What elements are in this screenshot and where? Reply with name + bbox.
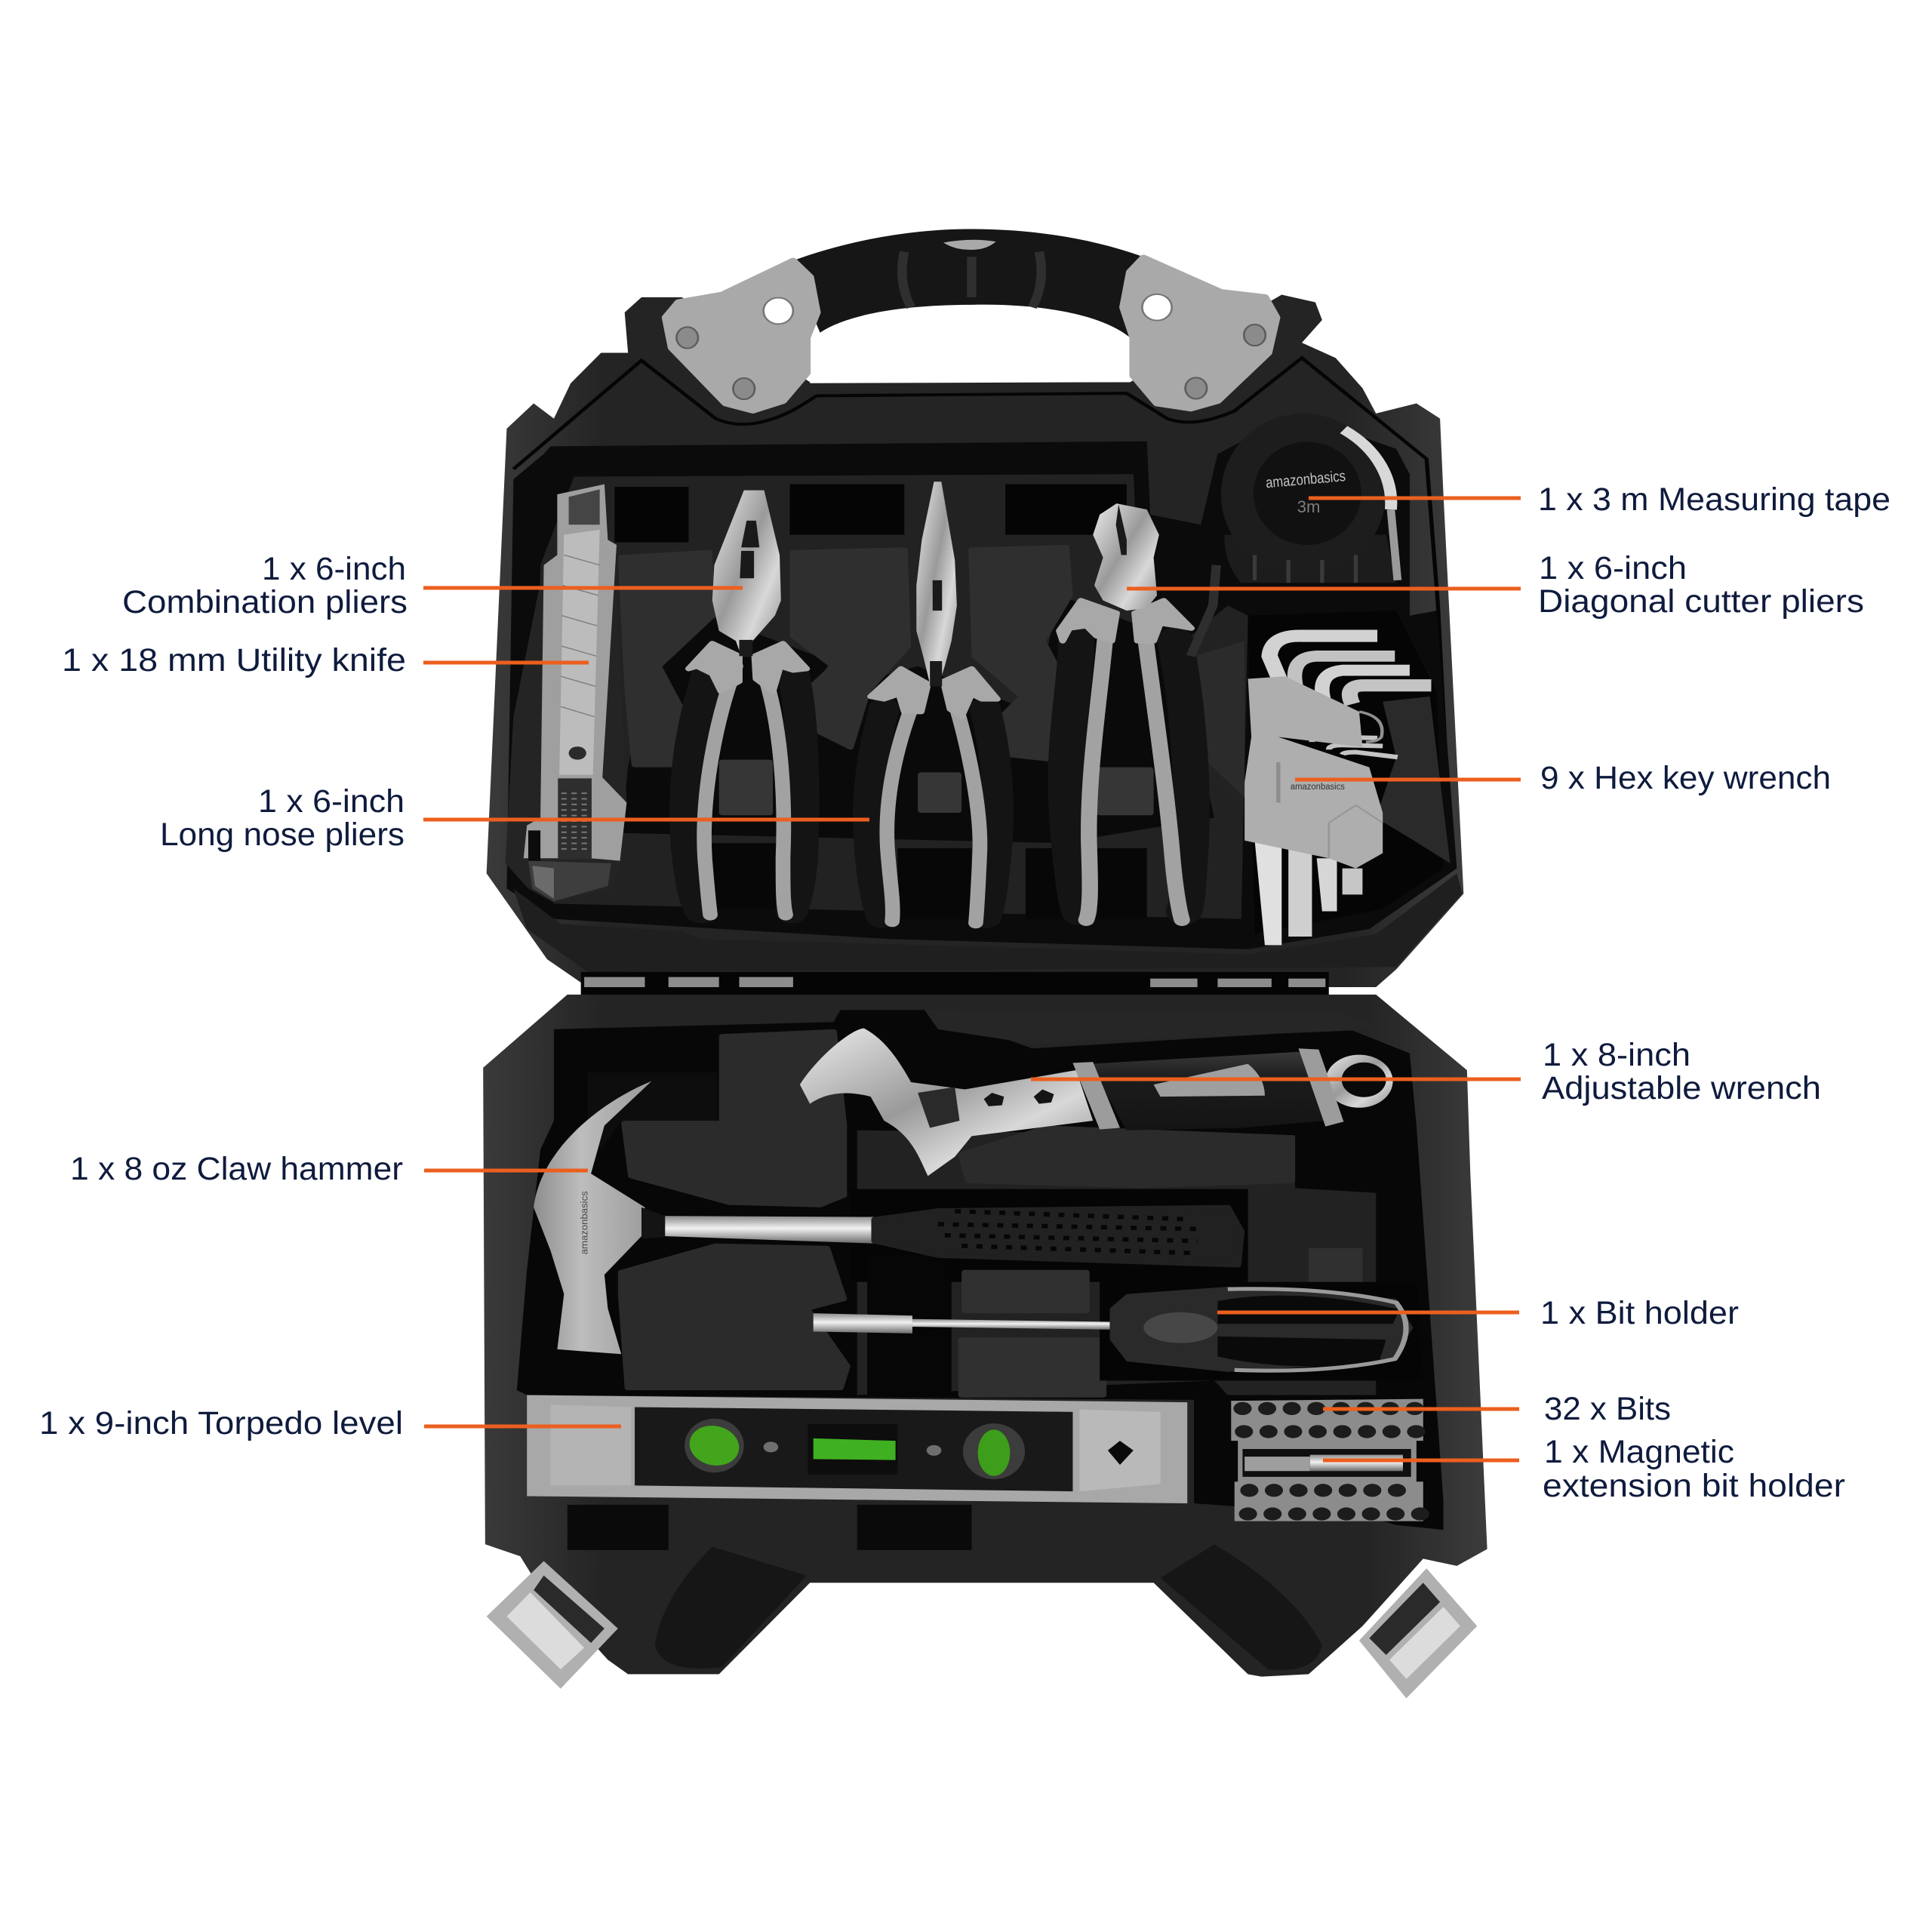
label: adjustable wrench quantity: 1 x 8-inch	[1543, 1037, 1690, 1073]
left handle bracket	[666, 261, 817, 411]
callout: adjustable wrench	[1031, 1037, 1821, 1106]
callout: combination pliers	[122, 551, 743, 620]
icon: combination pliers	[686, 491, 807, 915]
icon: diagonal cutter pliers	[1060, 503, 1192, 920]
label: bits: 32 x Bits	[1544, 1391, 1671, 1427]
label: hex key wrench: 9 x Hex key wrench	[1540, 760, 1831, 796]
right handle bracket	[1123, 258, 1276, 408]
hex key brand text: amazonbasics	[1291, 781, 1345, 792]
tape brand text: amazonbasics	[1265, 468, 1346, 491]
icon: right latch	[1359, 1568, 1477, 1698]
label: torpedo level: 1 x 9-inch Torpedo level	[39, 1405, 403, 1441]
icon: long nose pliers	[868, 481, 998, 923]
toolbox base with hand tools	[483, 995, 1487, 1698]
icon: claw hammer	[534, 1081, 1241, 1354]
tape size text: 3m	[1297, 497, 1320, 516]
icon: left latch	[487, 1561, 618, 1689]
icon: measuring tape	[1221, 414, 1398, 583]
label: long nose pliers quantity: 1 x 6-inch	[258, 783, 405, 820]
label: measuring tape: 1 x 3 m Measuring tape	[1538, 481, 1890, 518]
label: utility knife: 1 x 18 mm Utility knife	[62, 642, 406, 678]
label: extension bit holder name: extension bit holder	[1543, 1468, 1845, 1504]
hinges	[581, 972, 1329, 995]
lower panel with foot pads	[568, 1505, 1322, 1670]
icon: bit holder screwdriver	[814, 1282, 1423, 1380]
lid shell	[487, 295, 1463, 987]
callout: long nose pliers	[160, 783, 869, 853]
hammer brand text: amazonbasics	[579, 1191, 590, 1254]
icon: adjustable wrench	[800, 1029, 1393, 1176]
base recess	[517, 1010, 1444, 1530]
label: combination pliers quantity: 1 x 6-inch	[262, 551, 406, 587]
label: long nose pliers name: Long nose pliers	[160, 817, 405, 853]
label: adjustable wrench name: Adjustable wrench	[1542, 1070, 1821, 1106]
callout: diagonal cutter pliers	[1127, 550, 1864, 620]
label: diagonal cutter quantity: 1 x 6-inch	[1539, 550, 1687, 586]
label: claw hammer: 1 x 8 oz Claw hammer	[70, 1151, 403, 1187]
handle	[789, 229, 1140, 383]
toolbox lid with hand tools	[487, 229, 1463, 995]
label: magnetic quantity: 1 x Magnetic	[1544, 1434, 1734, 1470]
label: combination pliers name: Combination pliers	[122, 584, 408, 620]
handle grip	[789, 229, 1140, 337]
icon: utility knife	[506, 485, 626, 903]
label: bit holder: 1 x Bit holder	[1540, 1295, 1739, 1331]
callout: magnetic extension bit holder	[1323, 1434, 1845, 1504]
icon: lanyard	[1191, 565, 1217, 656]
label: diagonal cutter name: Diagonal cutter pliers	[1538, 583, 1864, 620]
icon: bits tray	[1231, 1399, 1423, 1521]
icon: torpedo level	[527, 1395, 1187, 1503]
handle opening	[810, 305, 1130, 383]
base shell	[483, 995, 1487, 1677]
icon: hex key wrench set	[1244, 635, 1431, 945]
lid tray recess	[506, 414, 1457, 949]
tray lower rim	[513, 873, 1463, 972]
